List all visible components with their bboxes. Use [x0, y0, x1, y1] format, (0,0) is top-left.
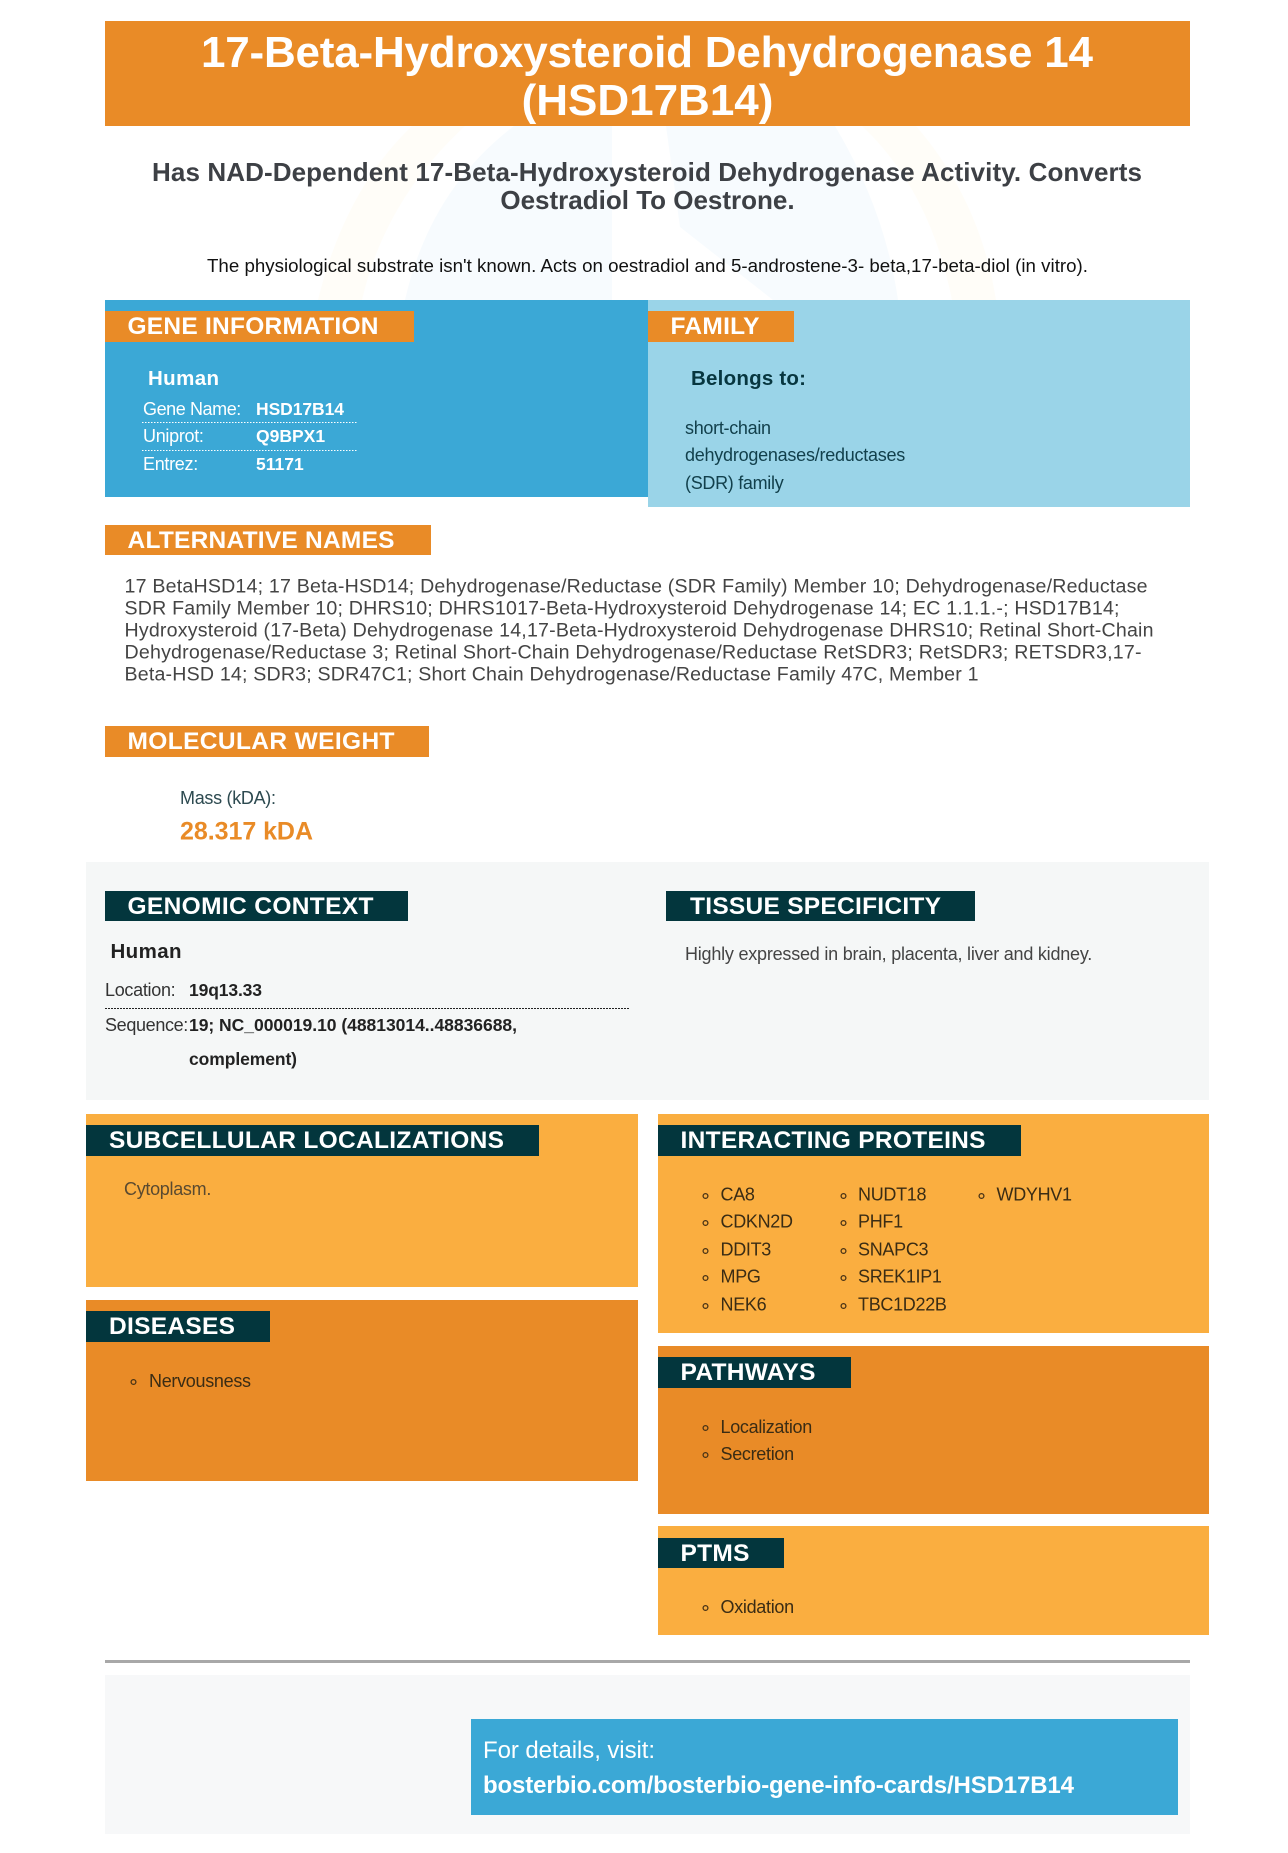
pathways list: Secretion	[720, 1444, 794, 1464]
alternative names text: Beta-HSD 14; SDR3; SDR47C1; Short Chain Dehydrogenase/Reductase Family 47C, Member 1	[124, 664, 978, 686]
protein list column 1: DDIT3	[720, 1240, 771, 1260]
family description: short-chain	[685, 418, 771, 438]
watermark logo	[318, 126, 996, 300]
protein list column 1: MPG	[720, 1266, 761, 1286]
gene details table: Uniprot:	[143, 426, 204, 446]
gene details table: Gene Name:	[143, 399, 241, 419]
gene details table: Q9BPX1	[256, 426, 325, 446]
alternative names text: 17 BetaHSD14; 17 Beta-HSD14; Dehydrogenase/Reductase (SDR Family) Member 10; Dehydrogenase/Reductase	[124, 576, 1148, 598]
heading: subcellular localizations: SUBCELLULAR LOCALIZATIONS	[109, 1127, 504, 1154]
panel: pathways	[658, 1346, 1209, 1514]
heading: ptms	[658, 1538, 784, 1568]
pathways list: Localization	[720, 1417, 812, 1437]
molecular weight value: Mass (kDA):	[180, 788, 276, 808]
location row: 19q13.33	[189, 980, 262, 1000]
heading: diseases	[86, 1311, 270, 1342]
subtitle	[152, 157, 1142, 215]
heading: pathways: PATHWAYS	[680, 1359, 816, 1386]
protein list column 2: PHF1	[858, 1212, 903, 1232]
panel: footer	[105, 1675, 1190, 1834]
heading: family	[648, 311, 794, 342]
sequence row: Sequence:	[105, 1015, 188, 1035]
protein list column 2: SNAPC3	[858, 1240, 929, 1260]
species label: Human	[148, 367, 219, 390]
protein list column 1: CA8	[720, 1184, 755, 1204]
heading: genomic context: GENOMIC CONTEXT	[128, 893, 374, 920]
alternative names text	[124, 576, 1154, 686]
sequence row: 19; NC_000019.10 (48813014..48836688,	[189, 1015, 517, 1035]
sequence row: complement)	[189, 1049, 297, 1069]
gene details table: 51171	[256, 454, 304, 474]
gene details table: HSD17B14	[256, 399, 344, 419]
heading: ptms: PTMS	[680, 1540, 750, 1567]
heading: molecular weight: MOLECULAR WEIGHT	[128, 728, 395, 755]
protein list column 2: NUDT18	[858, 1184, 927, 1204]
panel: ptms	[658, 1526, 1209, 1635]
location row: Location:	[105, 980, 175, 1000]
diseases list: Nervousness	[149, 1371, 251, 1391]
protein list column 2	[841, 1184, 947, 1314]
genomic species label: Human	[110, 940, 182, 963]
family description: dehydrogenases/reductases	[685, 445, 905, 465]
belongs to label: Belongs to:	[691, 367, 806, 390]
ptms list: Oxidation	[720, 1597, 794, 1617]
protein list column 2: SREK1IP1	[858, 1266, 942, 1286]
protein list column 1: CDKN2D	[720, 1212, 793, 1232]
panel: diseases	[86, 1300, 638, 1481]
heading: tissue specificity: TISSUE SPECIFICITY	[690, 893, 941, 920]
sequence row	[105, 1015, 517, 1069]
protein list column 1: NEK6	[720, 1294, 767, 1314]
panel: genomic context and tissue specificity	[86, 862, 1209, 1100]
alternative names text: Dehydrogenase/Reductase 3; Retinal Short-Chain Dehydrogenase/Reductase RetSDR3; RetSDR3; RETSDR3,17-	[124, 642, 1142, 664]
panel: gene information	[105, 300, 648, 497]
callout: details link: bosterbio.com/bosterbio-gene-info-cards/HSD17B14	[483, 1772, 1075, 1799]
subtitle: Oestradiol To Oestrone.	[500, 185, 795, 215]
panel: subcellular localizations	[86, 1114, 638, 1287]
family description: (SDR) family	[685, 473, 784, 493]
heading: alternative names: ALTERNATIVE NAMES	[128, 527, 394, 554]
title banner	[105, 21, 1190, 126]
callout: details link	[471, 1719, 1178, 1815]
heading: pathways	[658, 1357, 851, 1388]
alternative names text: Hydroxysteroid (17-Beta) Dehydrogenase 14,17-Beta-Hydroxysteroid Dehydrogenase DHRS10; Retinal Short-Chain	[124, 620, 1154, 642]
title banner: 17-Beta-Hydroxysteroid Dehydrogenase 14	[201, 28, 1094, 77]
heading: gene information: GENE INFORMATION	[128, 313, 378, 340]
heading: diseases: DISEASES	[109, 1313, 235, 1340]
tissue specificity text: Highly expressed in brain, placenta, liver and kidney.	[685, 944, 1092, 964]
protein list column 1	[703, 1184, 793, 1314]
panel: family	[648, 300, 1190, 507]
callout: details link: For details, visit:	[483, 1737, 655, 1764]
location row	[105, 980, 262, 1000]
description: The physiological substrate isn't known. Acts on oestradiol and 5-androstene-3- beta,17-beta-diol (in vitro).	[207, 255, 1088, 276]
alternative names text: SDR Family Member 10; DHRS10; DHRS1017-Beta-Hydroxysteroid Dehydrogenase 14; EC 1.1.1.-; HSD17B14;	[124, 598, 1120, 620]
family description	[685, 418, 905, 493]
gene details table: Entrez:	[143, 454, 198, 474]
subcellular text: Cytoplasm.	[124, 1179, 211, 1199]
panel: interacting proteins	[658, 1114, 1209, 1333]
protein list column 2: TBC1D22B	[858, 1294, 947, 1314]
heading: family: FAMILY	[670, 313, 760, 340]
subtitle: Has NAD-Dependent 17-Beta-Hydroxysteroid Dehydrogenase Activity. Converts	[152, 157, 1142, 187]
pathways list	[703, 1417, 812, 1464]
molecular weight value: 28.317 kDA	[180, 818, 313, 846]
protein list column 3: WDYHV1	[996, 1184, 1072, 1204]
title banner: (HSD17B14)	[522, 76, 773, 125]
heading: interacting proteins: INTERACTING PROTEINS	[680, 1127, 986, 1154]
molecular weight value	[180, 788, 313, 846]
gene details table	[142, 399, 357, 474]
